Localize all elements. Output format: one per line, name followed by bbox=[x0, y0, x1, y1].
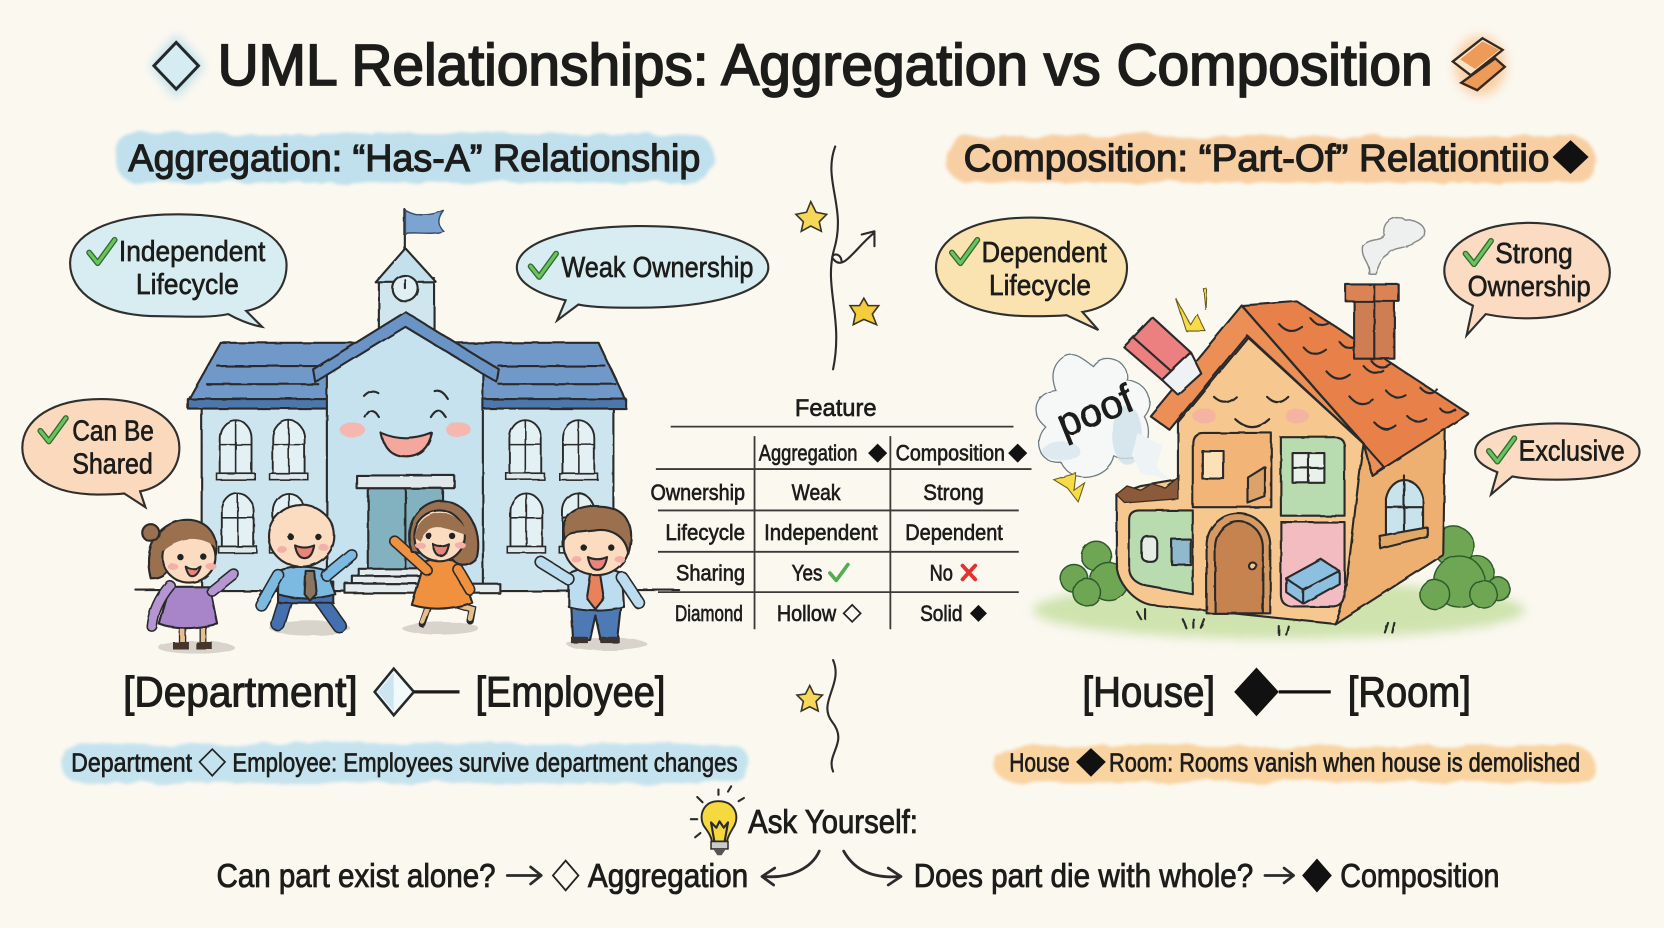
row: diamond bbox=[675, 601, 987, 626]
column header: Feature bbox=[795, 395, 877, 422]
poof cloud bbox=[1036, 355, 1169, 480]
decision row: composition: Does part die with whole? bbox=[914, 857, 1253, 894]
row: ownership: Ownership bbox=[651, 480, 745, 505]
column header bbox=[759, 395, 1027, 466]
arrow bbox=[1265, 868, 1294, 883]
door bbox=[1207, 514, 1270, 613]
row: sharing: Sharing bbox=[676, 560, 745, 585]
entrance door and steps bbox=[345, 475, 500, 593]
icon: light bulb bbox=[691, 786, 744, 855]
curved arrow: to aggregation bbox=[762, 851, 819, 885]
characters: employees bbox=[142, 501, 647, 654]
roof left eave bbox=[1150, 306, 1384, 475]
room: lower left bbox=[1129, 510, 1193, 594]
caption: composition example: House bbox=[1009, 749, 1070, 777]
employee: woman in orange bbox=[395, 501, 479, 635]
ask yourself heading bbox=[691, 786, 918, 855]
star bbox=[850, 298, 879, 325]
speech bubble: can be shared: Shared bbox=[72, 448, 153, 480]
hollow diamond bbox=[553, 861, 578, 890]
bush left bbox=[1060, 541, 1128, 606]
side wall bbox=[1335, 416, 1445, 624]
sparks bbox=[1054, 289, 1207, 502]
speech bubble: exclusive bbox=[1475, 423, 1640, 495]
arrow bbox=[507, 867, 541, 884]
ask yourself text: Ask Yourself: bbox=[748, 803, 918, 840]
uml diagram: house to room: [House] bbox=[1082, 669, 1215, 716]
flag and pole bbox=[404, 209, 444, 255]
row: diamond: Diamond bbox=[675, 601, 743, 626]
title bbox=[151, 33, 1506, 98]
column header: Aggregation bbox=[759, 441, 857, 466]
caption: aggregation example: Department bbox=[71, 749, 192, 777]
star bbox=[796, 202, 827, 231]
grass tufts bbox=[1137, 609, 1394, 635]
smoke bbox=[1362, 218, 1425, 274]
room: upper left bbox=[1193, 433, 1271, 507]
speech bubble: independent lifecycle: Independent bbox=[119, 236, 265, 268]
row: ownership: Strong bbox=[923, 480, 984, 505]
bush right bbox=[1420, 526, 1510, 609]
uml diagram: department to employee: [Employee] bbox=[475, 669, 665, 716]
speech bubble: exclusive: Exclusive bbox=[1519, 436, 1625, 468]
curled arrow bbox=[832, 231, 874, 263]
decision row: aggregation: Aggregation bbox=[588, 857, 748, 894]
caption: aggregation example bbox=[62, 744, 749, 783]
row: diamond: Solid bbox=[920, 601, 963, 626]
building smiling face bbox=[340, 391, 471, 456]
row: lifecycle: Dependent bbox=[905, 520, 1004, 545]
speech bubble: weak ownership bbox=[517, 226, 768, 320]
roof right slope bbox=[1242, 301, 1469, 475]
employee: man with tie bbox=[541, 506, 647, 651]
comparison table bbox=[651, 395, 1032, 629]
speech bubble: strong ownership: Ownership bbox=[1468, 271, 1591, 303]
column header: Composition bbox=[896, 441, 1005, 466]
house sleepy face bbox=[1193, 397, 1308, 427]
row: lifecycle bbox=[665, 520, 1004, 545]
illustration: house being demolished bbox=[1033, 218, 1525, 639]
heading: aggregation: Aggregation: “Has-A” Relationship bbox=[128, 137, 700, 180]
room: upper right bbox=[1281, 437, 1345, 516]
speech bubble: strong ownership bbox=[1444, 223, 1610, 335]
icon: orange composite diamond bbox=[1453, 36, 1506, 96]
row: ownership bbox=[651, 480, 984, 505]
speech bubble: can be shared bbox=[22, 399, 179, 507]
speech bubble: dependent lifecycle: Lifecycle bbox=[989, 270, 1091, 302]
decision row: composition: Composition bbox=[1340, 857, 1499, 894]
icon: hollow diamond bbox=[151, 35, 204, 98]
solid diamond connector bbox=[1234, 667, 1331, 716]
uml diagram: house to room: [Room] bbox=[1348, 669, 1471, 716]
hollow diamond connector bbox=[375, 669, 460, 715]
decision row: aggregation: Can part exist alone? bbox=[217, 857, 496, 894]
clock tower bbox=[376, 248, 436, 342]
ground line bbox=[136, 589, 679, 591]
caption: composition example bbox=[995, 746, 1593, 782]
speech bubble: can be shared: Can Be bbox=[72, 415, 154, 447]
row: sharing: Yes bbox=[792, 560, 822, 585]
curved arrow: to composition bbox=[844, 851, 901, 885]
decision row: composition bbox=[914, 857, 1499, 894]
caption: composition example: Room: Rooms vanish when house is demolished bbox=[1109, 749, 1580, 777]
speech bubble: independent lifecycle: Lifecycle bbox=[136, 269, 239, 301]
uml diagram: department to employee: [Department] bbox=[123, 669, 358, 716]
windows bbox=[217, 420, 597, 553]
illustration: school building bbox=[136, 209, 679, 593]
row: diamond: Hollow bbox=[777, 601, 837, 626]
heading: composition: Composition: “Part-Of” Relationtiio bbox=[964, 137, 1549, 180]
decision row: aggregation bbox=[217, 857, 748, 894]
chimney bbox=[1346, 284, 1399, 359]
central divider: top squiggle with stars bbox=[796, 146, 879, 369]
central divider: bottom squiggle with star bbox=[797, 660, 838, 771]
employee: bald man in blue bbox=[261, 505, 351, 636]
speech bubble: weak ownership: Weak Ownership bbox=[561, 252, 753, 284]
rubble edge bbox=[1116, 478, 1178, 503]
uml diagram: department to employee bbox=[123, 669, 665, 716]
row: lifecycle: Independent bbox=[764, 520, 878, 545]
row: sharing: No bbox=[930, 560, 953, 585]
speech bubble: strong ownership: Strong bbox=[1495, 238, 1573, 270]
speech bubble: independent lifecycle bbox=[70, 214, 287, 327]
row: ownership: Weak bbox=[792, 480, 841, 505]
wing walls bbox=[202, 409, 613, 591]
uml diagram: house to room bbox=[1082, 667, 1471, 716]
poof cloud: poof bbox=[1050, 374, 1141, 447]
grass bbox=[1033, 582, 1525, 639]
row: sharing bbox=[676, 560, 975, 585]
speech bubble: dependent lifecycle: Dependent bbox=[982, 237, 1107, 269]
employee: woman in purple bbox=[142, 520, 235, 654]
caption: aggregation example: Employee: Employees survive department changes bbox=[232, 749, 738, 777]
speech bubble: dependent lifecycle bbox=[936, 218, 1127, 330]
arched side window bbox=[1380, 475, 1427, 549]
title text: UML Relationships: Aggregation vs Composition bbox=[218, 33, 1433, 98]
room: lower right with bed bbox=[1281, 522, 1345, 607]
wing roof bbox=[188, 343, 626, 409]
solid diamond bbox=[1302, 858, 1332, 892]
central pavilion bbox=[313, 312, 499, 591]
row: lifecycle: Lifecycle bbox=[665, 520, 745, 545]
table grid bbox=[656, 427, 1032, 629]
front wall bbox=[1116, 337, 1364, 624]
eraser bbox=[1124, 317, 1201, 395]
